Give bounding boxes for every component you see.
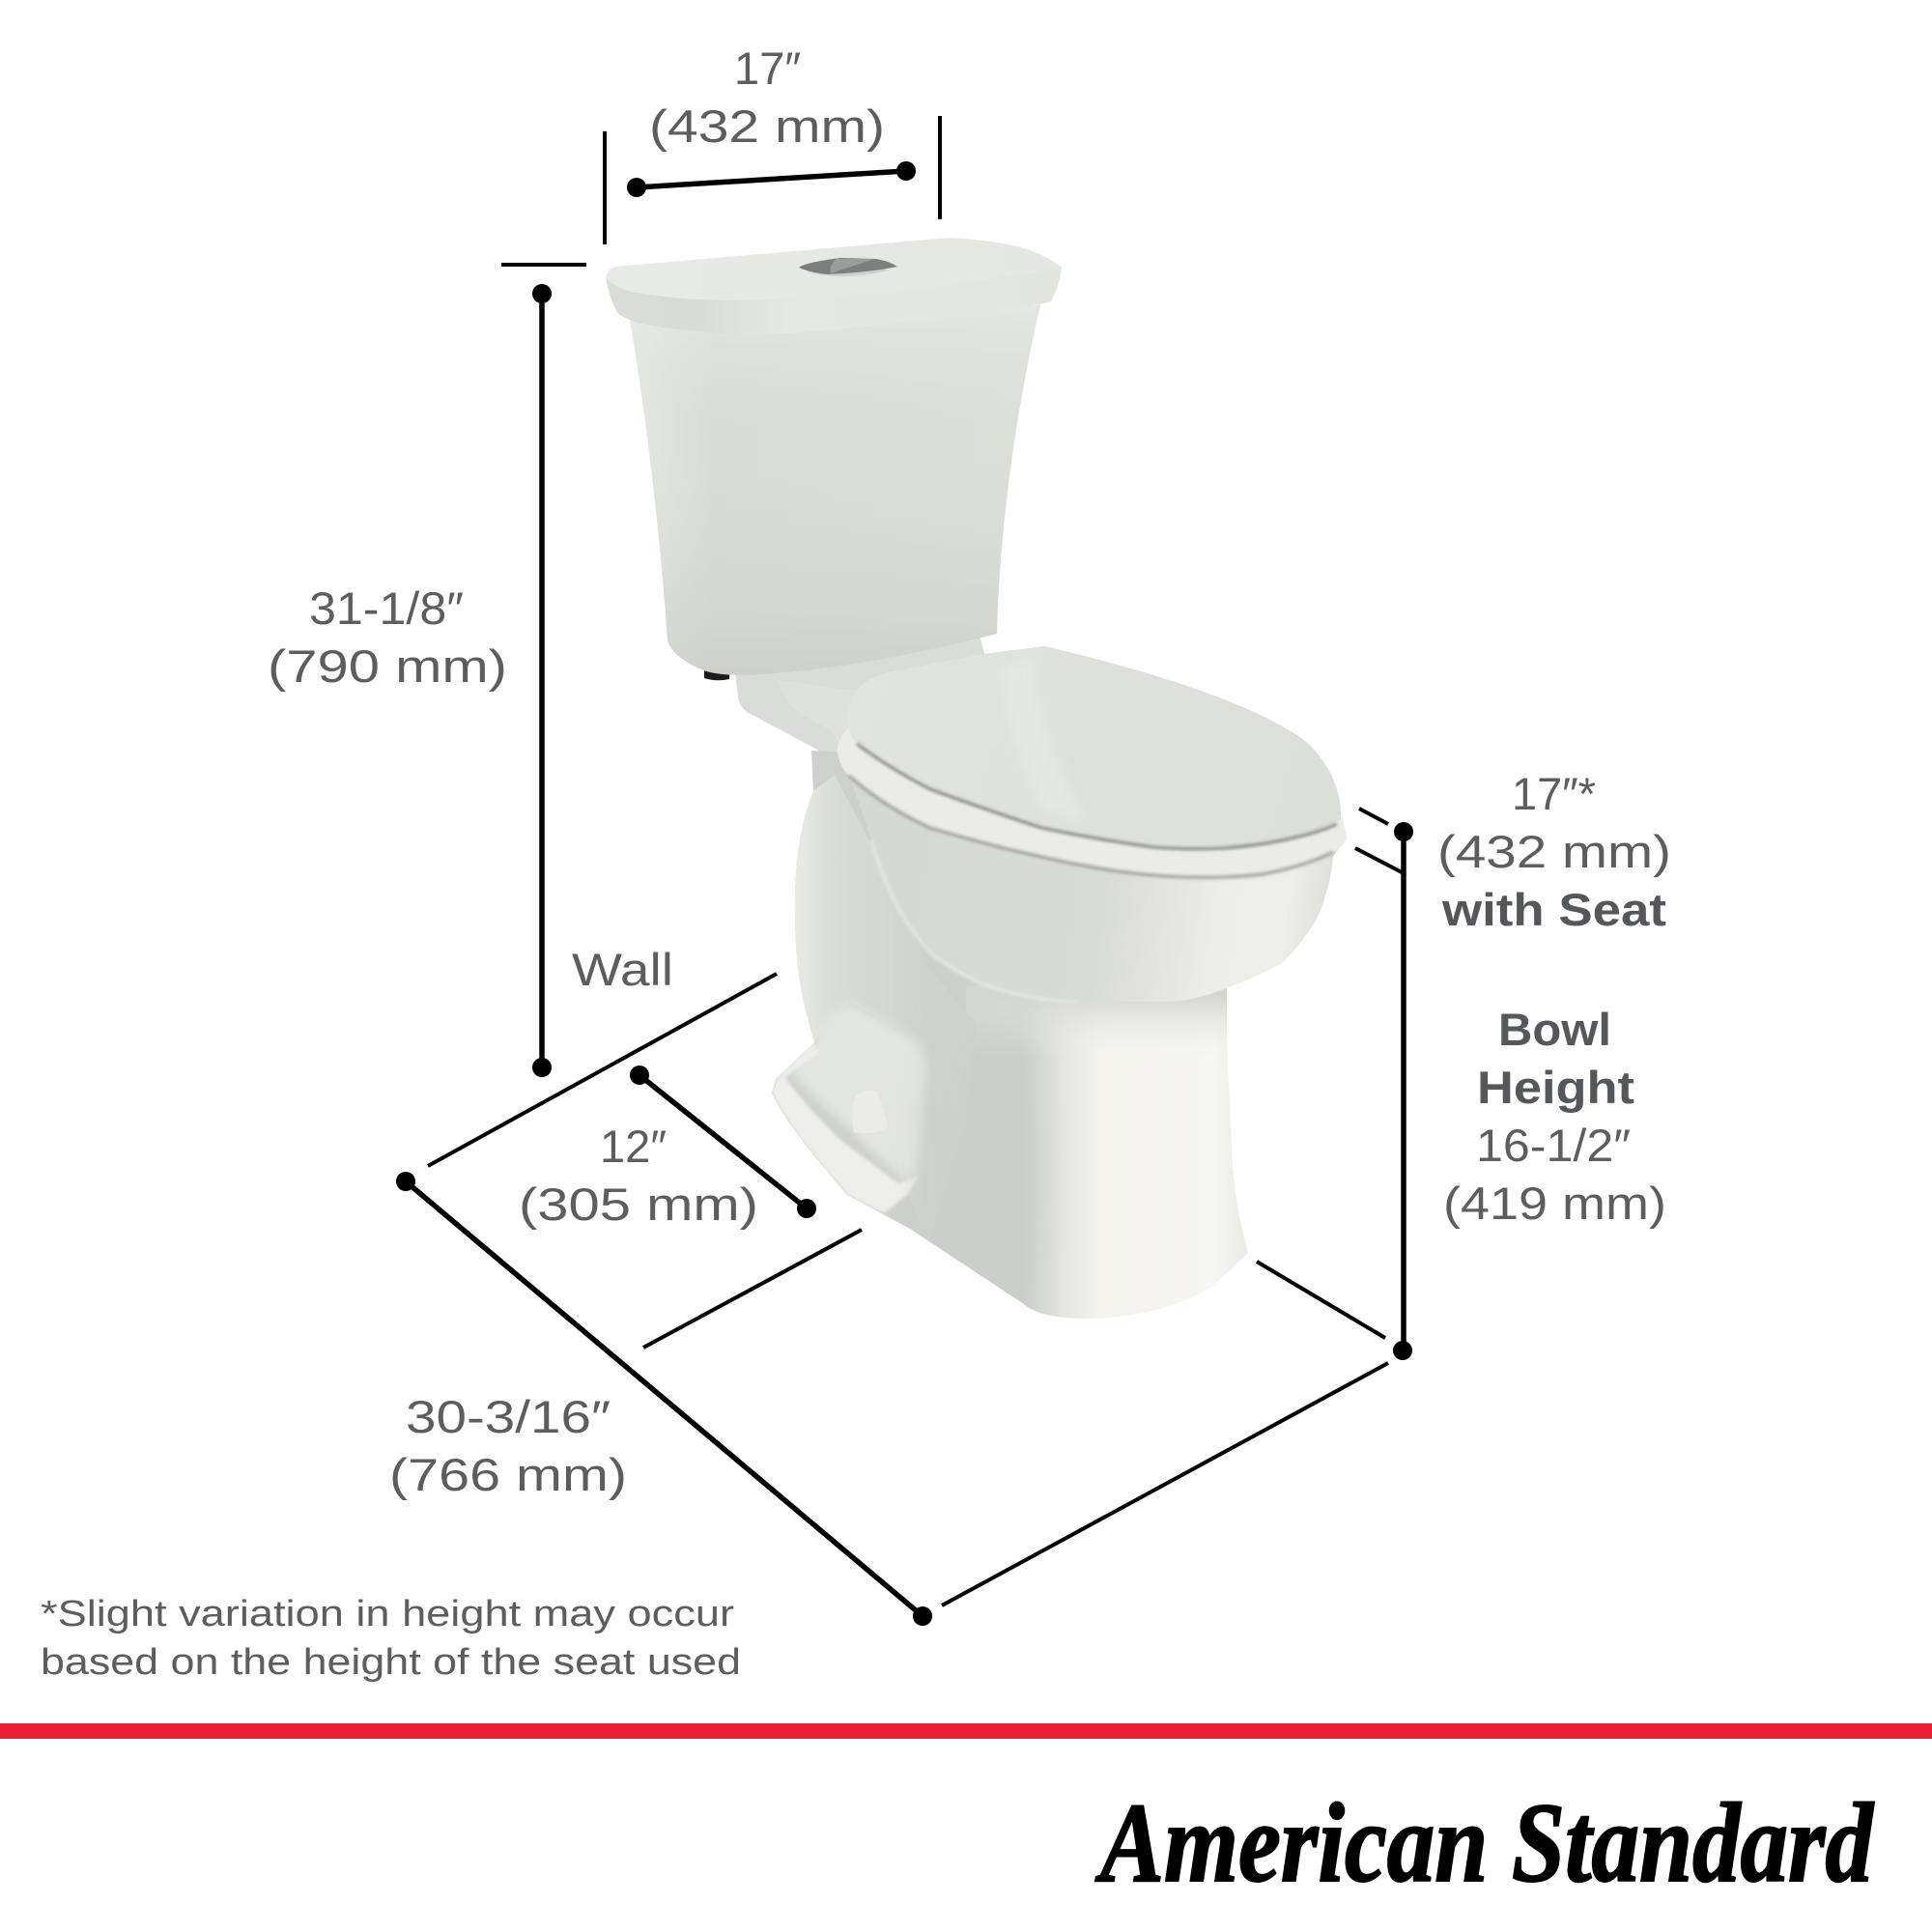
bowl height arrow bbox=[1393, 822, 1413, 1360]
dimension: total height bbox=[268, 265, 586, 1077]
tank shading bbox=[630, 305, 1040, 675]
dimension: rough-in bbox=[428, 974, 862, 1348]
top tick bbox=[501, 263, 586, 267]
bowl height label bbox=[1443, 1004, 1666, 1229]
tank width label: (432 mm) bbox=[649, 100, 885, 152]
rough-in label bbox=[519, 1121, 758, 1230]
seat height label bbox=[1437, 768, 1671, 935]
depth label: (766 mm) bbox=[389, 1449, 627, 1500]
seat ring shadow bbox=[849, 776, 1333, 877]
tank lid top bbox=[606, 238, 1062, 300]
height label: 31-1/8″ bbox=[309, 582, 464, 634]
depth label: 30-3/16″ bbox=[406, 1391, 611, 1442]
drain bolt bbox=[704, 667, 729, 680]
footnote: based on the height of the seat used bbox=[41, 1642, 741, 1683]
seat ticks bbox=[1355, 809, 1404, 873]
tank width label: 17″ bbox=[734, 43, 801, 94]
seat height label: with Seat bbox=[1441, 884, 1666, 935]
tank neck bbox=[735, 628, 985, 763]
lid shadow line bbox=[857, 744, 1337, 849]
tank width label bbox=[649, 43, 885, 152]
rough-in arrow bbox=[630, 1065, 816, 1218]
bowl rim edge bbox=[871, 840, 1078, 1002]
bolt cap bbox=[852, 1119, 866, 1133]
depth arrow bbox=[396, 1172, 932, 1626]
footnote bbox=[41, 1594, 741, 1683]
tank lid side bbox=[606, 261, 1062, 335]
left base shading bbox=[918, 1005, 1038, 1299]
dimension: depth bbox=[389, 1172, 1388, 1626]
bowl height label: Bowl bbox=[1498, 1004, 1611, 1055]
upper base shade bbox=[966, 985, 1227, 1058]
rough-in label: (305 mm) bbox=[519, 1179, 758, 1230]
bowl height label: 16-1/2″ bbox=[1476, 1120, 1631, 1171]
height arrow bbox=[532, 284, 552, 1077]
bowl height label: (419 mm) bbox=[1443, 1178, 1666, 1229]
neck ridge bbox=[779, 680, 862, 755]
seat ring bbox=[838, 726, 1347, 877]
trapway shading bbox=[795, 775, 929, 1241]
height label: (790 mm) bbox=[268, 640, 507, 692]
red divider band bbox=[0, 1723, 1932, 1739]
seat height label: 17″* bbox=[1512, 768, 1596, 819]
front reference line bbox=[942, 1363, 1388, 1605]
flush button bbox=[799, 258, 897, 276]
dimension: bowl height bbox=[1257, 768, 1671, 1360]
tank body bbox=[630, 305, 1040, 675]
base details bbox=[772, 775, 976, 1241]
seat lid bbox=[847, 646, 1341, 849]
rough-in label: 12″ bbox=[600, 1121, 667, 1172]
depth label bbox=[389, 1391, 627, 1500]
bowl bbox=[838, 753, 1347, 1002]
rough-in reference line bbox=[643, 1230, 862, 1348]
dimension: tank width bbox=[605, 43, 940, 244]
wall label: Wall bbox=[572, 944, 673, 995]
seat height label: (432 mm) bbox=[1437, 826, 1671, 877]
toilet illustration bbox=[606, 238, 1347, 1319]
pedestal and trapway bbox=[772, 751, 1248, 1319]
tank width arrow bbox=[627, 161, 916, 197]
wall line bbox=[428, 974, 777, 1166]
base recess bbox=[790, 1002, 927, 1182]
bowl height label: Height bbox=[1477, 1062, 1634, 1113]
base tick bbox=[1257, 1262, 1385, 1338]
tank width ticks bbox=[605, 116, 940, 244]
foot lip bbox=[772, 1042, 918, 1213]
footnote: *Slight variation in height may occur bbox=[41, 1594, 734, 1634]
height label bbox=[268, 582, 507, 692]
lid highlight bbox=[1000, 657, 1087, 821]
